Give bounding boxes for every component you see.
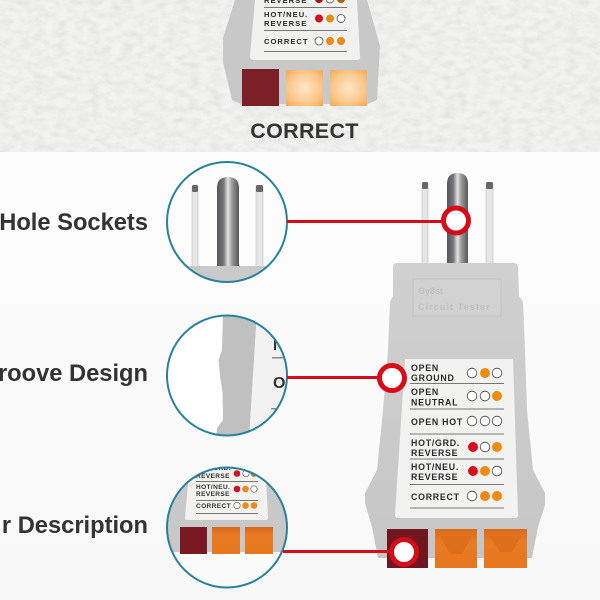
heading: groove design: roove Design [0,361,148,387]
legend label [395,359,518,518]
callout: groove pointer [287,366,404,390]
zoom circle: indicator lights: REVERSE [196,473,230,480]
legend label: OPEN [411,387,439,397]
callout: prong pointer [287,208,468,233]
legend label: HOT/NEU. [411,462,459,472]
heading: hole sockets: Hole Sockets [0,210,148,236]
legend label: OPEN HOT [411,417,463,427]
panel: textured wall with correct-state tester: CORRECT [264,37,309,46]
zoom circle: groove [166,314,288,436]
zoom circle: groove: O [273,375,285,392]
heading: color description: r Description [2,513,148,539]
zoom circle: groove: N [273,337,285,354]
indicator windows [387,529,527,568]
panel: textured wall with correct-state tester: REVERSE [264,19,307,28]
zoom circle: indicator lights: HOT/NEU. [196,484,230,491]
legend label: NEUTRAL [411,398,458,408]
legend label: GROUND [411,373,455,383]
embossed model plate: Gy8st [418,286,443,296]
zoom circle: indicator lights: REVERSE [196,491,230,498]
tester device [365,173,545,568]
legend label: REVERSE [411,448,458,458]
zoom circle: indicator lights: HOT/GRD. [196,465,231,472]
panel: textured wall with correct-state tester: HOT/NEU. [264,10,308,19]
legend label: OPEN [411,363,439,373]
legend label: REVERSE [411,472,458,482]
zoom circle: indicator lights [165,460,290,588]
tester body [365,263,545,558]
legend label: HOT/GRD. [411,438,460,448]
embossed model plate: Circuit Tester [418,302,491,312]
zoom circle: prongs [166,161,288,283]
page background [0,152,600,600]
panel: textured wall with correct-state tester [0,0,600,152]
embossed model plate [413,279,501,316]
caption: correct: CORRECT [250,119,359,143]
zoom circle: indicator lights: CORRECT [196,503,231,510]
legend label: CORRECT [411,492,460,502]
callout: indicator pointer [283,540,416,564]
prongs [422,173,493,264]
